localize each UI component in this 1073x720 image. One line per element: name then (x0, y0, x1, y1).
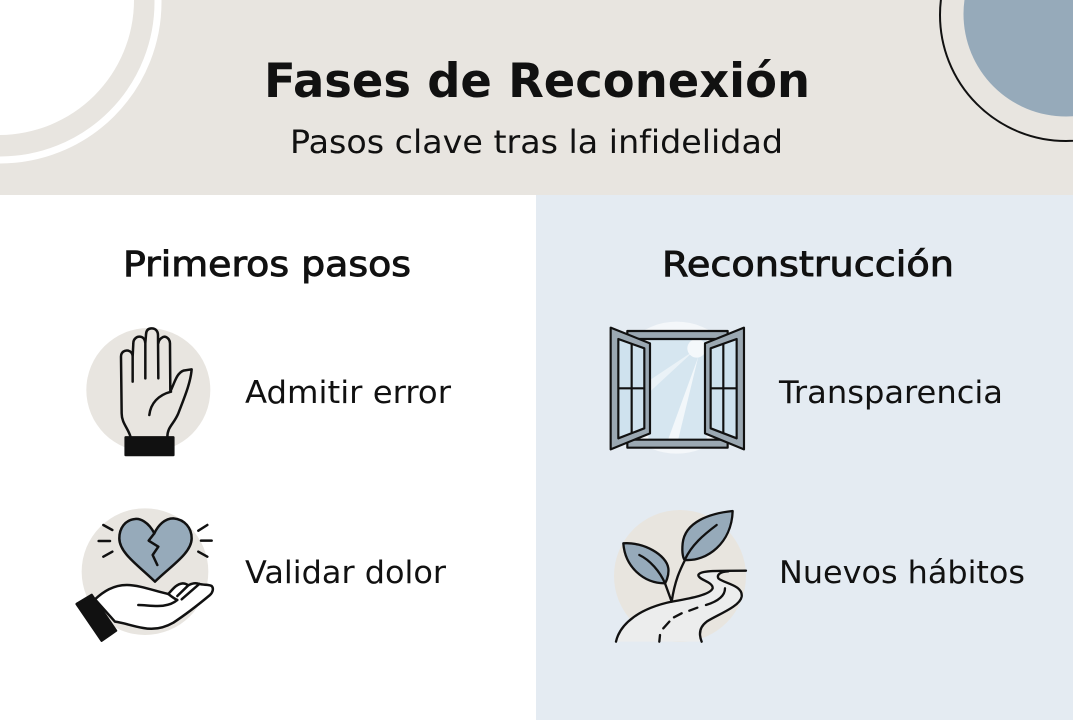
panel: left column (0, 195, 536, 720)
decoration: top right circle (940, 0, 1073, 141)
label: Validar dolor: Validar dolor (245, 555, 446, 591)
label: Nuevos hábitos: Nuevos hábitos (779, 555, 1025, 591)
label: Transparencia: Transparencia (778, 375, 1003, 411)
heading: Reconstrucción: Reconstrucción (662, 245, 954, 285)
icon: open window (611, 322, 744, 454)
label: Admitir error: Admitir error (245, 375, 451, 411)
icon: raised hand (86, 328, 210, 455)
subtitle: Pasos clave tras la infidelidad (290, 123, 783, 161)
decoration: top left circle (0, 0, 158, 160)
heading: Primeros pasos: Primeros pasos (123, 245, 411, 285)
panel: header (0, 0, 1073, 195)
icon: broken heart over open hand (77, 508, 213, 641)
icon: sprout and winding road (614, 510, 746, 642)
panel: right column (536, 195, 1073, 720)
title: Fases de Reconexión (264, 54, 810, 109)
